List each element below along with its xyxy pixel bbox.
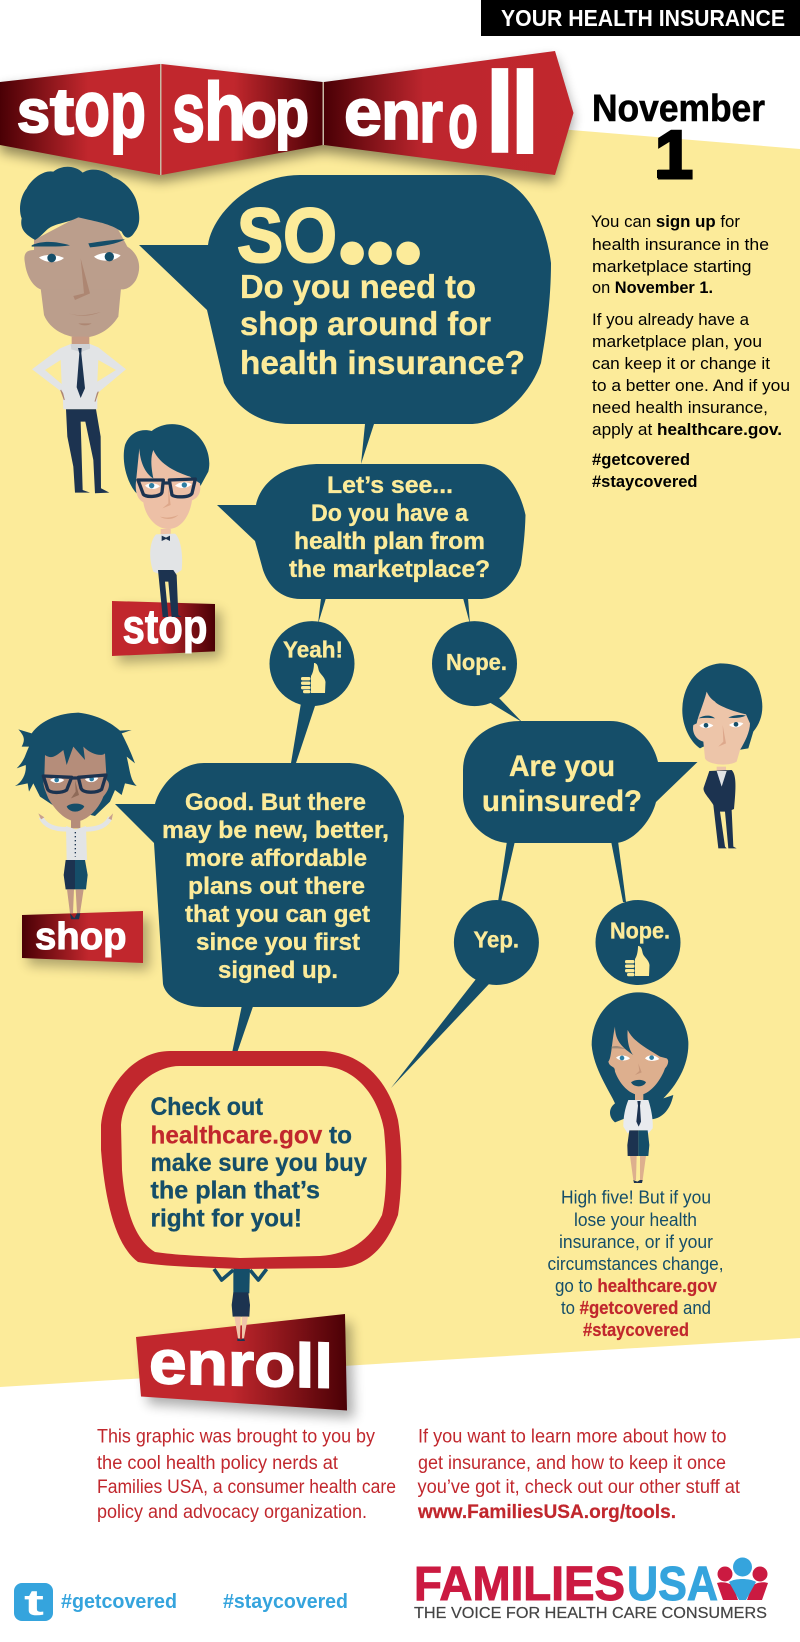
learn more text: get insurance, and how to keep it once (418, 1453, 726, 1474)
learn more text (417, 1427, 741, 1523)
shop sign: shop (35, 916, 126, 958)
top black label: YOUR HEALTH INSURANCE (501, 5, 785, 31)
SO heading: SO (237, 193, 337, 279)
call to action text: healthcare.gov to (150, 1122, 352, 1150)
icon: twitter (14, 1582, 53, 1623)
answer bubble: Good: more affordable (185, 845, 367, 872)
intro text column: #getcovered (592, 450, 690, 469)
banner: stop shop enroll (0, 48, 574, 182)
character: enroll woman (214, 1265, 267, 1341)
logo: Families USA: USA (627, 1558, 718, 1611)
call to action text: the plan that’s (150, 1177, 320, 1205)
banner word: enroll: l (510, 48, 540, 178)
high five note: #staycovered (583, 1320, 689, 1340)
banner word: shop: s (172, 65, 205, 160)
date heading: November 1: 1 (655, 117, 693, 193)
intro text column: marketplace starting (592, 257, 752, 276)
banner word: enroll: n (381, 76, 421, 154)
enroll sign (136, 1314, 354, 1418)
question bubble: uninsured: Are you (509, 750, 615, 783)
learn more text: you’ve got it, check out our other stuff at (418, 1477, 741, 1498)
SO heading (237, 135, 426, 295)
enroll sign: enroll (149, 1328, 333, 1402)
logo: Families USA: FAMILIES (414, 1558, 625, 1611)
credit text (97, 1427, 396, 1523)
question bubble: marketplace plan: health plan from (294, 528, 485, 555)
high five note: circumstances change, (548, 1254, 724, 1274)
icon: thumbs up (301, 663, 326, 693)
stop sign: stop (122, 601, 208, 654)
high five note (548, 1188, 724, 1340)
question bubble: uninsured: uninsured? (482, 785, 642, 818)
date heading: November 1: November (592, 88, 765, 130)
logo: Families USA: THE VOICE FOR HEALTH CARE CONSUMERS (414, 1605, 767, 1622)
intro text column: You can sign up for (591, 212, 740, 231)
question bubble: marketplace plan: the marketplace? (289, 556, 490, 583)
banner word: enroll: o (448, 76, 478, 164)
banner word: enroll: e (344, 75, 382, 149)
answer bubble: Good: signed up. (218, 957, 338, 984)
answer bubble: Yeah: Yeah! (283, 636, 343, 662)
hashtag: getcovered: #getcovered (61, 1591, 177, 1613)
banner word: shop: h (204, 67, 246, 158)
logo: Families USA (414, 1558, 768, 1622)
banner word: stop: t (50, 74, 74, 148)
banner word: enroll: r (419, 75, 443, 158)
icon: thumbs up (625, 946, 650, 976)
call to action text: right for you! (150, 1205, 302, 1233)
answer bubble: Good: Good. But there (185, 789, 366, 816)
intro text column: need health insurance, (592, 398, 768, 417)
bubble connector (361, 424, 374, 464)
main speech bubble (139, 135, 551, 464)
banner word: shop: o (241, 79, 277, 151)
answer bubble: Good: may be new, better, (162, 817, 389, 844)
learn more text: www.FamiliesUSA.org/tools. (417, 1502, 676, 1523)
call to action box (101, 1051, 401, 1269)
answer bubble: Good: since you first (196, 929, 360, 956)
credit text: the cool health policy nerds at (97, 1453, 339, 1474)
answer bubble: Good (115, 763, 404, 1007)
main question: shop around for (240, 305, 491, 342)
intro text column: If you already have a (592, 310, 750, 329)
credit text: policy and advocacy organization. (97, 1502, 367, 1523)
intro text column: marketplace plan, you (592, 332, 762, 351)
main question (240, 268, 525, 381)
banner word: stop: s (17, 78, 50, 145)
call to action text (150, 1093, 367, 1233)
banner word: stop: o (74, 64, 110, 152)
banner word: stop: p (110, 64, 146, 155)
answer bubble: second Nope (596, 841, 680, 985)
learn more text: If you want to learn more about how to (418, 1427, 726, 1448)
character: woman with long hair (592, 992, 688, 1183)
answer bubble: Good: plans out there (188, 873, 365, 900)
intro text column: apply at healthcare.gov. (592, 420, 782, 439)
answer bubble: Yep: Yep. (474, 926, 519, 952)
question bubble: marketplace plan: Do you have a (311, 500, 469, 527)
question bubble: uninsured (463, 721, 698, 843)
call to action text: Check out (150, 1093, 264, 1121)
credit text: This graphic was brought to you by (97, 1427, 375, 1448)
call to action text: make sure you buy (150, 1149, 367, 1177)
intro text column: #staycovered (592, 472, 698, 491)
answer bubble: second Nope: Nope. (610, 918, 670, 944)
character: man with glasses and bow tie (124, 424, 209, 617)
high five note: to #getcovered and (561, 1298, 711, 1318)
SO heading: ... (334, 135, 426, 295)
yellow background panel (0, 83, 800, 1387)
top black label (481, 0, 800, 36)
intro text column: to a better one. And if you (592, 376, 790, 395)
intro text column: on November 1. (592, 278, 713, 297)
icon: family figures (717, 1558, 768, 1600)
banner word: enroll: l (485, 50, 515, 177)
high five note: High five! But if you (561, 1188, 711, 1208)
character: woman with glasses and spiky hair (15, 713, 137, 919)
hashtag: staycovered: #staycovered (223, 1591, 348, 1613)
intro text column: health insurance in the (592, 235, 769, 254)
high five note: go to healthcare.gov (555, 1276, 717, 1296)
shop sign (22, 911, 149, 970)
connector: Good bubble to call to action (232, 1005, 254, 1053)
intro text column (591, 212, 790, 491)
answer bubble: Yep (391, 841, 539, 1088)
question bubble: marketplace plan: Let’s see... (327, 472, 453, 499)
answer bubble: Yeah (270, 598, 354, 763)
credit text: Families USA, a consumer health care (97, 1477, 396, 1498)
intro text column: can keep it or change it (592, 354, 770, 373)
character: man in suit (682, 663, 762, 848)
main question: health insurance? (240, 344, 525, 381)
answer bubble: Nope: Nope. (446, 649, 507, 675)
character: tall man with curly hair (20, 167, 139, 493)
question bubble: marketplace plan (217, 464, 526, 599)
high five note: insurance, or if your (559, 1232, 713, 1252)
date heading: November 1 (592, 88, 765, 193)
banner word: shop: p (275, 75, 309, 151)
main question: Do you need to (240, 268, 476, 305)
high five note: lose your health (574, 1210, 697, 1230)
answer bubble: Good: that you can get (185, 901, 370, 928)
icon: twitter: t (24, 1582, 44, 1623)
answer bubble: Nope (432, 598, 522, 722)
